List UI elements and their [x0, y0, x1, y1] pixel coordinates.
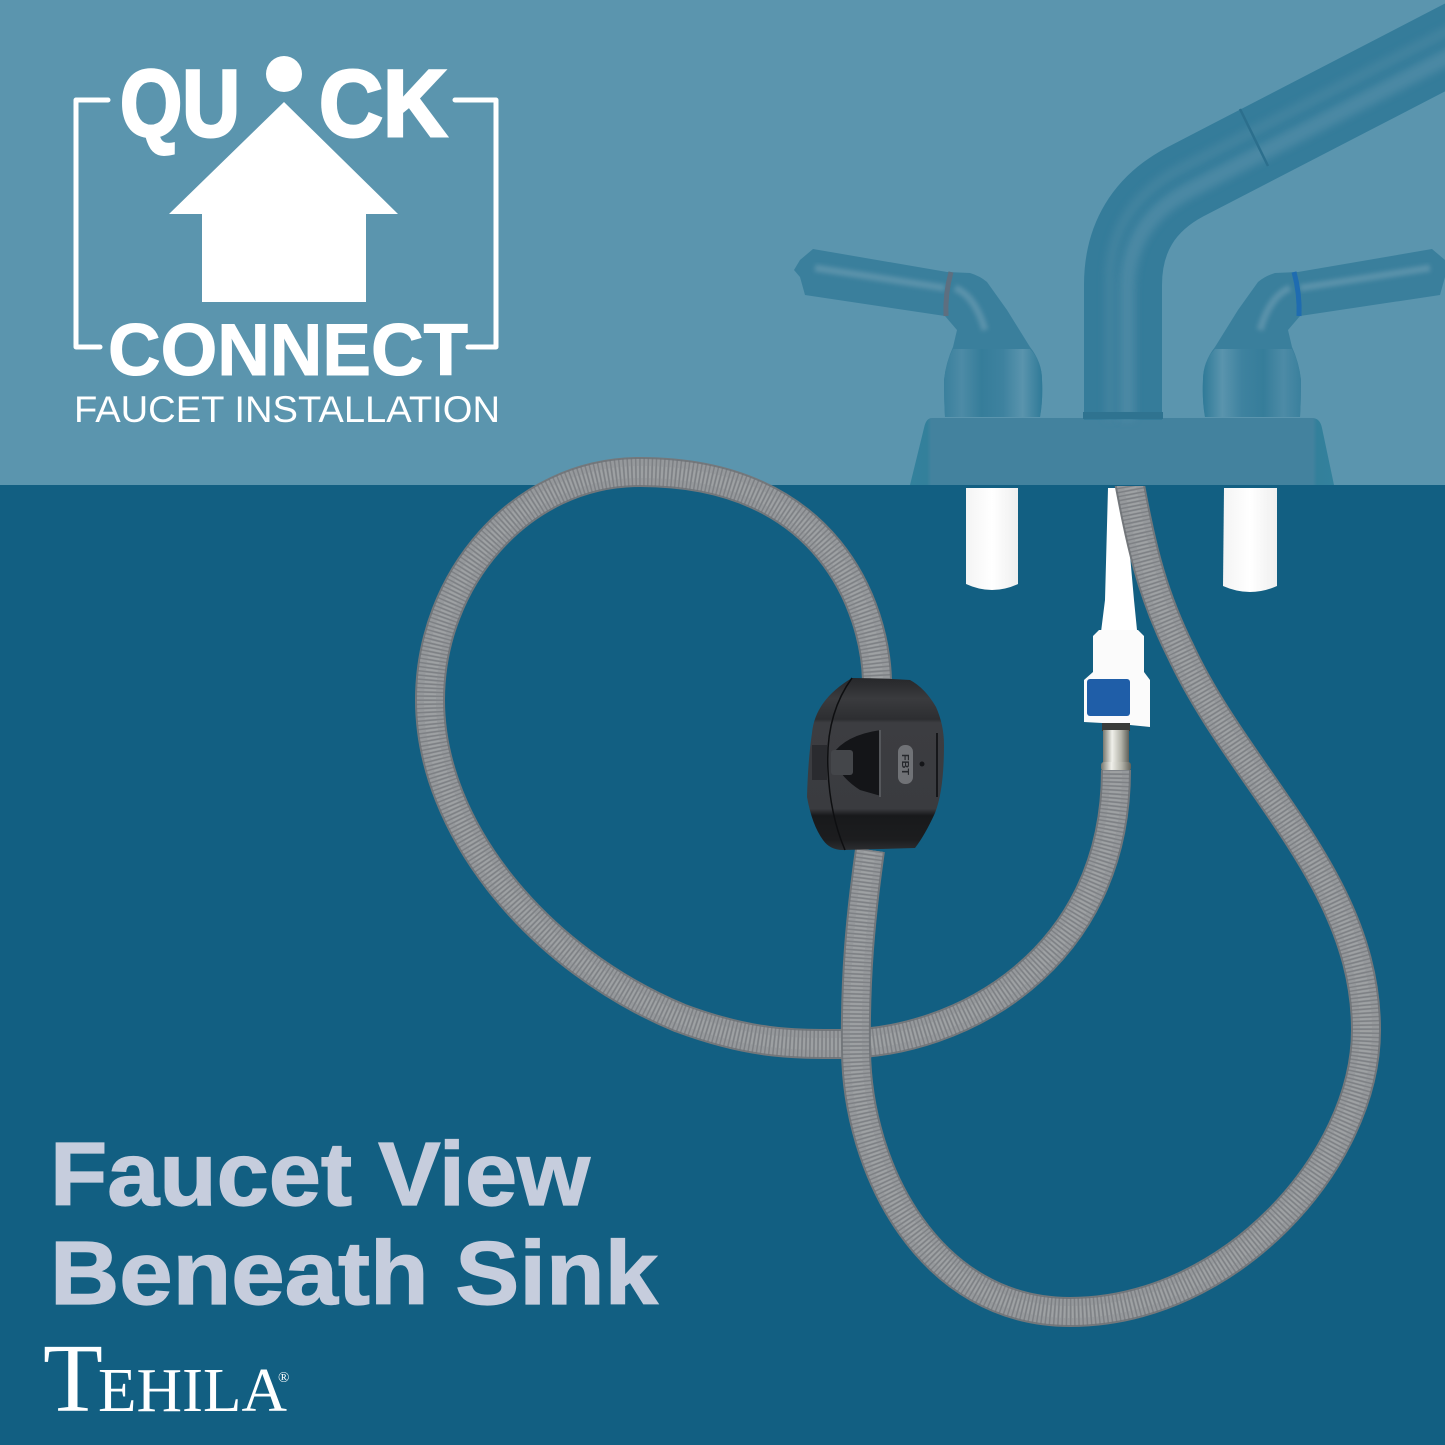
brand: Tehila	[43, 1325, 289, 1433]
logo subtitle: FAUCET INSTALLATION	[74, 389, 500, 430]
right handle	[1203, 249, 1445, 417]
block label: FBT	[899, 754, 910, 775]
logo word: QU: QU	[120, 51, 240, 157]
icon: i dot	[266, 56, 302, 92]
faucet spout	[1083, 4, 1445, 420]
brand name: EHILA	[98, 1357, 287, 1425]
connector blue button	[1087, 679, 1130, 716]
braided hose: loop	[430, 472, 1116, 1044]
logo: Quick Connect Faucet Installation	[74, 51, 500, 430]
right white post	[1223, 488, 1277, 592]
heading	[50, 1125, 659, 1324]
icon: house	[169, 102, 398, 302]
block label	[898, 745, 913, 784]
block seam	[828, 678, 852, 850]
logo word: CK: CK	[319, 51, 447, 157]
faucet base	[910, 418, 1334, 485]
faucet	[794, 4, 1445, 592]
metal fitting	[1101, 723, 1131, 771]
braided hose: long run	[856, 470, 1366, 1312]
left handle	[794, 249, 1042, 417]
heading line 2: Beneath Sink	[50, 1224, 659, 1324]
logo word: CONNECT: CONNECT	[108, 310, 468, 391]
heading line 1: Faucet View	[50, 1125, 591, 1225]
block body	[807, 678, 944, 850]
block clip	[812, 730, 937, 797]
registered mark: ®	[278, 1370, 289, 1386]
logo bracket	[76, 100, 496, 347]
brand initial: T	[43, 1325, 103, 1433]
white supply tube and connector	[1084, 488, 1150, 771]
bottom panel background	[0, 485, 1445, 1445]
connector body	[1084, 630, 1150, 727]
black flow restrictor block	[807, 678, 944, 850]
white tube	[1100, 488, 1138, 640]
top panel background	[0, 0, 1445, 485]
left white post	[966, 488, 1018, 590]
